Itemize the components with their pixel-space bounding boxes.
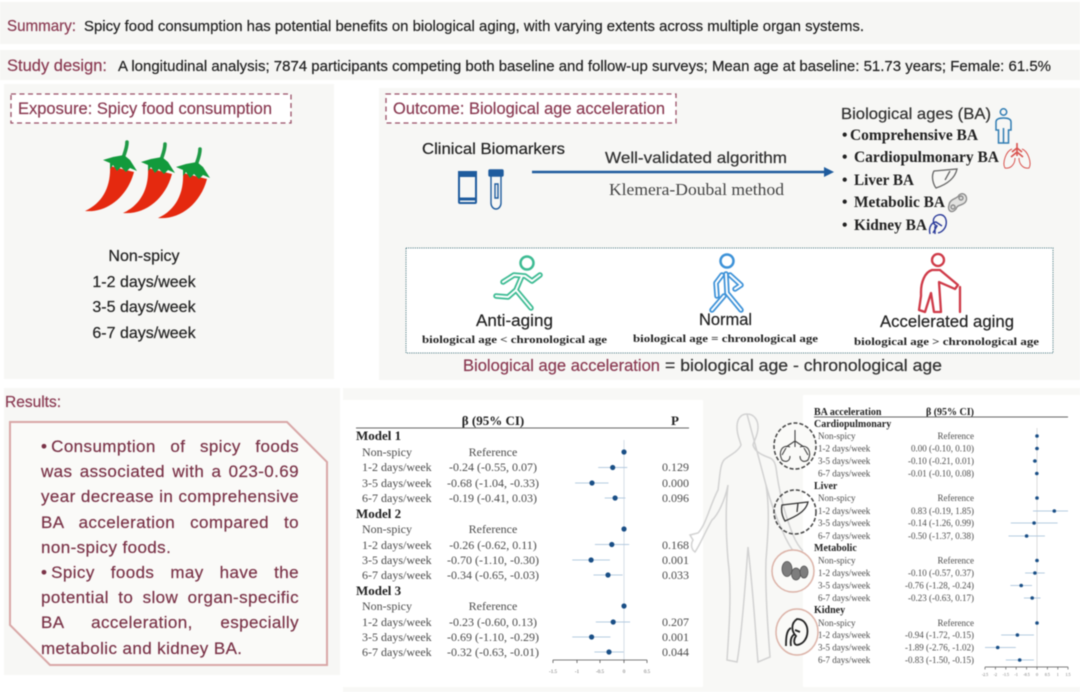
forest model 3: 1-2 days/week [362,615,432,629]
icon: lungs callout [774,423,816,469]
organ forest liver: -0.50 (-1.37, 0.38) [908,531,974,541]
exposure categories: 6-7 days/week [92,325,197,342]
arrow: algorithm [532,167,834,177]
forest model 3: Model 3 [356,583,402,598]
results heading: Results: [5,394,61,411]
exposure heading [11,94,291,123]
organ forest axis: -2 [994,672,997,677]
organ forest liver: 1-2 days/week [818,506,871,516]
organ forest metabolic: -0.10 (-0.57, 0.37) [908,568,974,578]
icon: person [996,109,1011,143]
biological ages list: • [842,194,847,211]
organ forest axis [982,667,1070,677]
organ forest axis: 1 [1057,672,1059,677]
organ forest metabolic: -0.23 (-0.63, 0.17) [908,593,974,603]
exposure categories: Non-spicy [108,248,180,265]
organ forest metabolic: 6-7 days/week [818,593,871,603]
forest model 1: -0.24 (-0.55, 0.07) [449,460,537,474]
forest model 2: -0.70 (-1.10, -0.30) [447,553,539,567]
forest model 1: 3-5 days/week [362,476,432,490]
panel: summary: Spicy food consumption has potential benefits on biological aging, with varying extents across multiple organ systems. [84,18,864,35]
forest model 3: Reference [469,599,517,613]
forest model 3: -0.69 (-1.10, -0.29) [447,630,539,644]
forest header: β (95% CI) [462,413,524,428]
organ forest kidney: 6-7 days/week [818,655,871,665]
panel: aging categories [406,248,1053,353]
results text: metabolic and kidney BA. [41,638,242,658]
organ forest kidney: Kidney [814,605,845,616]
forest axis: 0.5 [644,670,651,675]
biological ages list: • [842,172,847,189]
forest axis: 0 [623,670,626,675]
organ forest kidney: 1-2 days/week [818,630,871,640]
exposure heading: Exposure: Spicy food consumption [18,99,272,118]
organ forest cardiopulmonary: Reference [938,431,974,441]
organ forest kidney: Non-spicy [818,618,856,628]
forest model 3: 3-5 days/week [362,630,432,644]
results text: potential to slow organ-specific [41,588,299,607]
forest model 1: 1-2 days/week [362,460,432,474]
results text: • Consumption of spicy foods [41,437,299,456]
organ forest kidney: 3-5 days/week [818,642,871,652]
forest axis: -0.5 [596,670,604,675]
forest model 1: 0.096 [662,491,689,505]
forest model 2: 0.168 [662,538,689,552]
organ forest metabolic: Reference [938,556,974,566]
organ forest kidney [814,605,1039,665]
organ forest cardiopulmonary: 0.00 (-0.10, 0.10) [911,444,974,454]
forest model 3: 0.001 [662,630,689,644]
organ forest metabolic: 1-2 days/week [818,568,871,578]
forest model 3: 0.044 [662,645,689,659]
forest model 2: 1-2 days/week [362,538,432,552]
organ forest cardiopulmonary [814,419,1039,478]
label: normal [633,310,818,345]
icon: walker [712,254,741,310]
biological ages list: • [842,149,847,166]
organ forest cardiopulmonary: Cardiopulmonary [814,419,891,430]
forest model 1: Model 1 [356,428,401,443]
panel: organ forest plot [803,395,1080,687]
biological ages list: Kidney BA [854,217,928,234]
panel: body map background [343,388,1080,692]
forest model 3: 0.207 [662,615,689,629]
panel: summary [0,2,1080,44]
panel: study design: A longitudinal analysis; 7874 participants competing both baseline and follow-up surveys; Mean age at baseline: 51.73 years; Female: 61.5% [118,58,1051,75]
label: normal: Normal [699,310,752,329]
organ forest axis: 0 [1036,672,1038,677]
forest model 2 [356,506,689,582]
organ forest metabolic: Non-spicy [818,556,856,566]
label: anti-aging: biological age < chronological age [422,334,607,346]
clinical biomarkers label: Clinical Biomarkers [422,141,565,158]
results text: was associated with a 023-0.69 [41,462,299,481]
organ forest liver: -0.14 (-1.26, 0.99) [908,518,974,528]
organ forest liver: Reference [938,493,974,503]
label: accelerated aging [854,312,1039,348]
icon: human body outline [690,414,803,662]
forest model 2: 3-5 days/week [362,553,432,567]
forest model 3: 6-7 days/week [362,645,432,659]
organ forest metabolic: Metabolic [814,543,857,554]
organ forest axis: 0.5 [1045,672,1050,677]
algorithm label: Well-validated algorithm [605,150,787,167]
exposure categories: 3-5 days/week [92,299,197,316]
forest model 3: -0.32 (-0.63, -0.01) [447,645,539,659]
method label: Klemera-Doubal method [609,180,785,199]
icon: test tube [489,170,503,209]
exposure categories [92,248,197,342]
results callout frame [10,422,327,665]
forest model 2: -0.26 (-0.62, 0.11) [449,538,537,552]
biological ages list: • [842,127,847,144]
label: anti-aging: Anti-aging [476,311,553,330]
organ forest liver: 6-7 days/week [818,531,871,541]
forest model 1: -0.68 (-1.04, -0.33) [447,476,539,490]
outcome heading: Outcome: Biological age acceleration [393,99,665,118]
panel: outcome [379,88,1080,380]
organ forest axis: -1 [1015,672,1018,677]
forest model 2: 6-7 days/week [362,568,432,582]
biological ages list: Comprehensive BA [850,127,979,144]
results text: year decrease in comprehensive [41,487,299,506]
forest model 1: 6-7 days/week [362,491,432,505]
icon: liver [933,169,957,188]
forest model 2: Model 2 [356,506,401,521]
organ forest liver: Liver [814,481,838,492]
icon: kidney callout [776,609,818,655]
label: accelerated aging: biological age > chronological age [854,336,1039,348]
formula: Biological age acceleration [463,357,660,375]
organ forest cardiopulmonary: 1-2 days/week [818,444,871,454]
forest model 1: Non-spicy [362,445,412,459]
biological ages list: Metabolic BA [854,194,946,211]
forest model 2: Reference [469,522,517,536]
organ forest metabolic [814,543,1045,603]
forest model 1: 0.000 [662,476,689,490]
forest axis: -1.5 [549,670,557,675]
biological ages list: Liver BA [854,172,915,189]
forest model 2: 0.001 [662,553,689,567]
organ forest cardiopulmonary: 3-5 days/week [818,456,871,466]
biological ages list: • [842,217,847,234]
organ forest cardiopulmonary: -0.10 (-0.21, 0.01) [908,456,974,466]
organ forest cardiopulmonary: -0.01 (-0.10, 0.08) [908,468,974,478]
organ forest cardiopulmonary: Non-spicy [818,431,856,441]
panel: results [4,388,340,675]
organ forest header [814,407,1068,418]
organ forest kidney: -1.89 (-2.76, -1.02) [905,642,974,652]
organ forest header: β (95% CI) [926,407,974,418]
organ forest metabolic: 3-5 days/week [818,580,871,590]
icon: kidney [930,215,946,234]
icon: liver callout [774,490,816,534]
organ forest cardiopulmonary: 6-7 days/week [818,468,871,478]
icon: elderly [919,254,960,312]
formula: = biological age - chronological age [665,357,942,375]
forest model 1: Reference [469,445,517,459]
biological ages list: Cardiopulmonary BA [854,149,1000,166]
formula [463,357,942,375]
label: accelerated aging: Accelerated aging [880,312,1014,331]
forest model 2: -0.34 (-0.65, -0.03) [447,568,539,582]
icon: metabolic [949,194,967,212]
forest axis: -1 [575,670,580,675]
organ forest liver: 3-5 days/week [818,518,871,528]
icon: metabolic callout [772,550,814,592]
forest header: P [671,413,679,428]
organ forest liver: 0.83 (-0.19, 1.85) [911,506,974,516]
organ forest kidney: -0.94 (-1.72, -0.15) [905,630,974,640]
panel: forest plot models [343,400,703,687]
organ forest kidney: Reference [938,618,974,628]
forest model 1: -0.19 (-0.41, 0.03) [449,491,537,505]
panel: study design [0,50,1080,80]
icon: lungs [1004,143,1030,168]
label: normal: biological age = chronological age [633,333,818,345]
organ forest axis: -1.5 [1003,672,1009,677]
results text: BA acceleration compared to [41,513,299,532]
forest header [356,413,689,428]
organ forest axis: 1.5 [1066,672,1070,677]
results text: non-spicy foods. [41,538,171,557]
forest model 3 [356,583,689,659]
organ forest axis: -0.5 [1023,672,1030,677]
icon: runner [496,256,540,308]
forest model 3: -0.23 (-0.60, 0.13) [449,615,537,629]
panel: study design: Study design: [7,56,107,75]
results text: BA acceleration, especially [41,613,299,632]
organ forest kidney: -0.83 (-1.50, -0.15) [905,655,974,665]
organ forest metabolic: -0.76 (-1.28, -0.24) [905,580,974,590]
icon: chili peppers [85,142,210,218]
panel: exposure [4,84,334,379]
organ forest liver [814,481,1068,541]
biological ages list [841,106,1000,234]
organ forest liver: Non-spicy [818,493,856,503]
outcome heading [386,94,676,123]
forest model 1 [356,428,689,505]
label: anti-aging [422,311,607,346]
panel: summary: Summary: [7,18,76,35]
results text [40,437,300,658]
icon: phone [459,172,476,203]
forest model 2: Non-spicy [362,522,412,536]
forest model 3: Non-spicy [362,599,412,613]
results text: • Spicy foods may have the [41,563,299,582]
exposure categories: 1-2 days/week [92,274,197,291]
forest axis [549,660,651,675]
organ forest header: BA acceleration [814,407,882,418]
forest model 2: 0.033 [662,568,689,582]
organ forest axis: -2.5 [982,672,988,677]
biological ages list: Biological ages (BA) [841,106,991,123]
forest model 1: 0.129 [662,460,689,474]
